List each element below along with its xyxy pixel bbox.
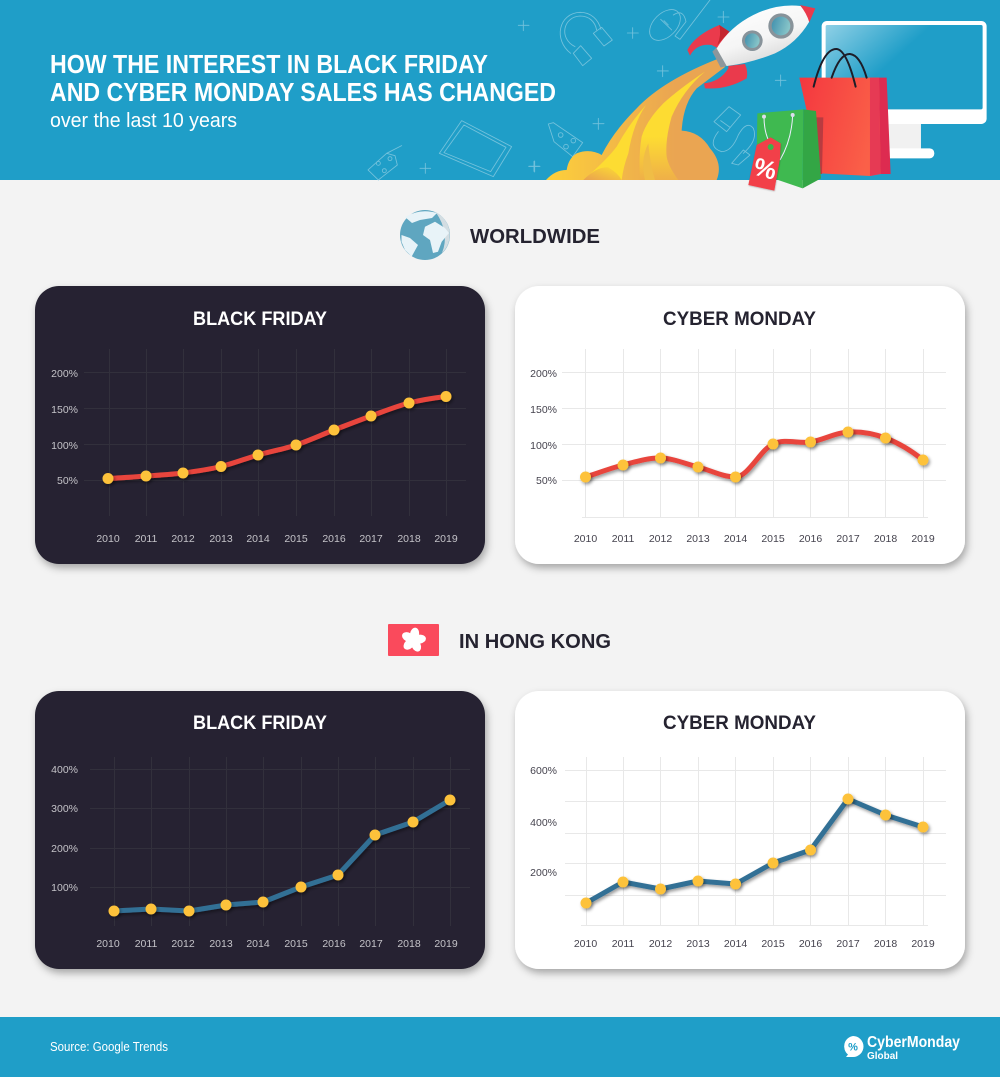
footer	[0, 1017, 1000, 1077]
title: AND CYBER MONDAY SALES HAS CHANGED	[50, 79, 556, 107]
line chart: 200%	[51, 368, 78, 380]
line chart: 2014	[246, 938, 270, 950]
icon: hong kong flag	[388, 624, 439, 656]
line chart: 2018	[397, 533, 421, 545]
line chart: 2013	[209, 938, 233, 950]
section heading: in hong kong	[388, 624, 611, 656]
panel: worldwide cyber monday	[515, 286, 965, 564]
line chart	[51, 757, 470, 950]
line chart: 2010	[574, 938, 597, 950]
header banner	[0, 0, 1000, 191]
line chart: 2012	[649, 533, 672, 545]
line chart: 2015	[284, 938, 308, 950]
line chart: 2011	[135, 533, 157, 545]
line chart: 2016	[799, 938, 822, 950]
illustration: green shopping bag with tag	[748, 109, 823, 191]
chart title: CYBER MONDAY	[663, 309, 816, 330]
line chart: 2019	[911, 533, 935, 545]
line chart: 200%	[51, 843, 78, 855]
line chart: 2010	[96, 533, 120, 545]
line chart	[51, 349, 466, 545]
line chart: 50%	[536, 475, 557, 487]
line chart: 200%	[530, 867, 557, 879]
line chart: 100%	[51, 440, 78, 452]
heading text: IN HONG KONG	[459, 631, 611, 653]
line chart: 400%	[51, 764, 78, 776]
line chart: 2013	[686, 533, 710, 545]
line chart: 2015	[761, 533, 785, 545]
icon: globe	[400, 210, 450, 260]
line chart: 150%	[51, 404, 78, 416]
illustration: rocket	[687, 5, 815, 89]
panel: hong kong cyber monday	[515, 691, 965, 969]
line chart: 600%	[530, 765, 557, 777]
background line icons	[368, 0, 786, 180]
line chart: 2017	[359, 533, 383, 545]
line chart: 2010	[96, 938, 120, 950]
line chart: 2018	[874, 533, 897, 545]
line chart: 2018	[874, 938, 897, 950]
line chart: 300%	[51, 803, 78, 815]
line chart: 400%	[530, 817, 557, 829]
logo: CyberMonday	[867, 1034, 960, 1051]
line chart: 2010	[574, 533, 597, 545]
title: over the last 10 years	[50, 110, 237, 132]
line chart: 100%	[51, 882, 78, 894]
chart title: CYBER MONDAY	[663, 713, 816, 734]
illustration: green shopping bag with tag: %	[751, 153, 780, 186]
line chart: 100%	[530, 440, 557, 452]
section heading: worldwide	[400, 210, 600, 260]
line chart: 50%	[57, 475, 78, 487]
line chart: 2016	[322, 938, 346, 950]
line chart: 2014	[246, 533, 270, 545]
panel: hong kong black friday	[35, 691, 485, 969]
title	[50, 51, 556, 132]
line chart: 150%	[530, 404, 557, 416]
line chart: 2012	[171, 533, 195, 545]
logo	[844, 1034, 960, 1062]
line chart: 2018	[397, 938, 421, 950]
line chart: 2011	[612, 533, 634, 545]
line chart: 2012	[649, 938, 672, 950]
line chart: 2013	[686, 938, 710, 950]
line chart: 2016	[322, 533, 346, 545]
line chart: 2016	[799, 533, 822, 545]
source text: Source: Google Trends	[50, 1040, 168, 1054]
logo: %	[848, 1042, 858, 1054]
line chart: 2014	[724, 533, 747, 545]
illustration: rocket flame	[546, 58, 725, 180]
line chart: 2011	[135, 938, 157, 950]
line chart: 2011	[612, 938, 634, 950]
line chart: 2019	[434, 938, 458, 950]
illustration: red shopping bag	[799, 49, 891, 176]
line chart: 2019	[911, 938, 935, 950]
line chart: 2017	[836, 938, 860, 950]
line chart: 2015	[284, 533, 308, 545]
line chart: 2015	[761, 938, 785, 950]
line chart	[530, 349, 946, 545]
line chart: 2013	[209, 533, 233, 545]
panel: worldwide black friday	[35, 286, 485, 564]
line chart: 2019	[434, 533, 458, 545]
chart title: BLACK FRIDAY	[193, 713, 327, 734]
line chart	[530, 757, 946, 950]
chart title: BLACK FRIDAY	[193, 309, 327, 330]
line chart: 2014	[724, 938, 747, 950]
line chart: 200%	[530, 368, 557, 380]
title: HOW THE INTEREST IN BLACK FRIDAY	[50, 51, 488, 79]
line chart: 2017	[836, 533, 860, 545]
illustration: monitor	[822, 21, 987, 158]
line chart: 2017	[359, 938, 383, 950]
logo: Global	[867, 1050, 898, 1062]
heading text: WORLDWIDE	[470, 226, 600, 248]
line chart: 2012	[171, 938, 195, 950]
